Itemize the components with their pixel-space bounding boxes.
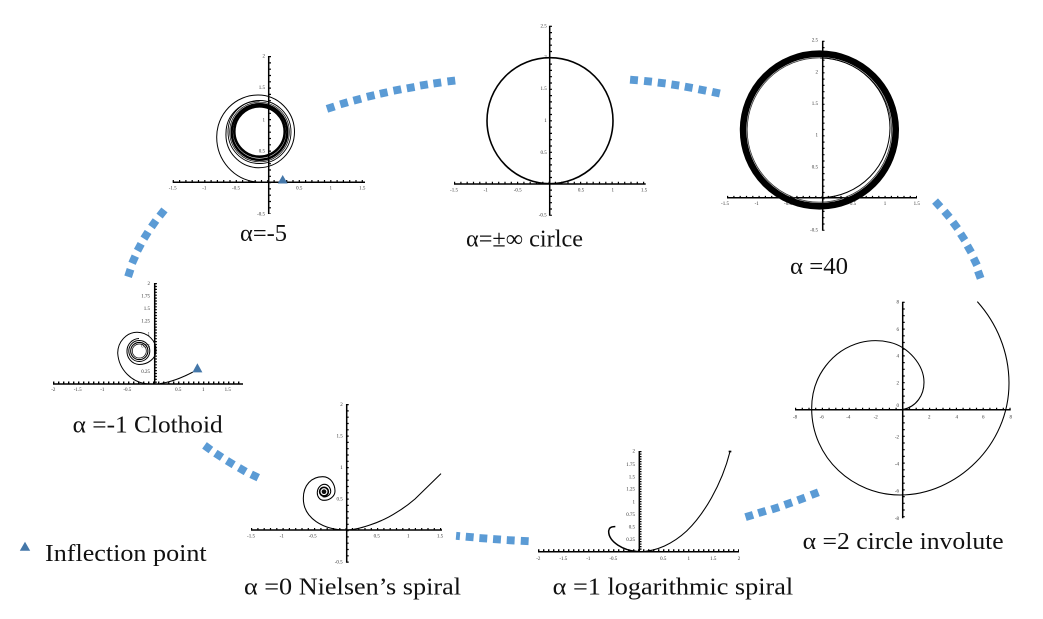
plot: alpha = 2 circle involute: -8: [793, 415, 798, 420]
plot: alpha = -1 clothoid: 2: [148, 282, 150, 287]
plot: alpha = -1 clothoid: -0.5: [123, 388, 132, 393]
plot: alpha = 2 circle involute: 8: [896, 300, 900, 305]
arrow: dashed link from logarithmic spiral to Nielsen's spiral: [456, 532, 528, 545]
plot: alpha = 0 Nielsen's spiral: 0.5: [336, 497, 343, 502]
plot: alpha = -5 spiral: 0.5: [259, 150, 266, 155]
plot: alpha = -1 clothoid: [51, 282, 243, 393]
plot: alpha = 2 circle involute: 2: [928, 415, 931, 420]
plot: alpha = 1 logarithmic spiral: 0.5: [629, 526, 636, 531]
plot: alpha = infinity circle: 1: [544, 119, 547, 124]
plot: alpha = 1 logarithmic spiral: -1.5: [559, 557, 568, 562]
plot: alpha = 1 logarithmic spiral: 0.5: [660, 557, 667, 562]
plot: alpha = -5 spiral: 1.5: [259, 86, 266, 91]
plot: alpha = infinity circle: -1.5: [450, 188, 458, 193]
plot: alpha = 40: -0.5: [784, 202, 792, 207]
arrow: dashed link from circle to alpha 40: [630, 76, 720, 97]
plot: alpha = 2 circle involute: -6: [820, 415, 824, 420]
plot: alpha = infinity circle: 2: [544, 55, 547, 60]
plot: alpha = 1 logarithmic spiral: 1.75: [626, 463, 636, 468]
plot: alpha = -1 clothoid: 1.5: [225, 388, 231, 393]
plot: alpha = -5 spiral: 1.5: [359, 186, 366, 192]
plot: alpha = infinity circle: 0.5: [540, 151, 547, 156]
plot: alpha = 2 circle involute: -2: [874, 415, 878, 420]
plot: alpha = infinity circle: [450, 24, 648, 219]
plot: alpha = 0 Nielsen's spiral: -1: [280, 534, 284, 539]
plot: alpha = 2 circle involute: 0: [896, 404, 900, 409]
label: alpha -1 clothoid: α =-1 Clothoid: [73, 413, 223, 439]
plot: alpha = infinity circle: 1: [611, 188, 614, 193]
plot: alpha = -5 spiral: -0.5: [232, 186, 240, 192]
icon: inflection point marker on alpha = -5: [278, 175, 288, 184]
arrow: dashed link from clothoid to alpha -5: [125, 208, 167, 277]
plot: alpha = 2 circle involute: -2: [895, 436, 899, 441]
plot: alpha = 40: 2: [816, 70, 818, 75]
plot: alpha = 2 circle involute: 8: [1009, 415, 1012, 420]
plot: alpha = -5 spiral: [169, 54, 366, 217]
icon: legend triangle: [20, 542, 30, 551]
plot: alpha = -5 spiral: 0.5: [296, 186, 303, 192]
plot: alpha = 0 Nielsen's spiral: -0.5: [335, 560, 343, 565]
plot: alpha = 40: 1: [816, 134, 818, 139]
plot: alpha = -1 clothoid: -1.5: [74, 388, 82, 393]
plot: alpha = -1 clothoid: 1: [202, 388, 205, 393]
icon: inflection point marker on clothoid: [192, 363, 202, 372]
plot: alpha = 2 circle involute: -8: [895, 517, 899, 522]
plot: alpha = 2 circle involute: 2: [896, 381, 900, 386]
plot: alpha = 40: -0.5: [810, 229, 818, 234]
plot: alpha = -1 clothoid: 0.5: [175, 388, 182, 393]
arrow: dashed link from involute to logarithmic spiral: [745, 489, 819, 520]
plot: alpha = -1 clothoid: 1.5: [144, 307, 150, 312]
plot: alpha = 2 circle involute: -4: [895, 463, 899, 468]
plot: alpha = 2 circle involute: 4: [955, 415, 958, 420]
plot: alpha = -5 spiral: -1: [202, 186, 207, 192]
plot: alpha = 1 logarithmic spiral: 1.5: [710, 557, 717, 562]
plot: alpha = infinity circle: 2.5: [540, 24, 547, 29]
plot: alpha = infinity circle: 1.5: [540, 87, 547, 92]
plot: alpha = -5 spiral: 1: [329, 186, 332, 192]
plot: alpha = 2 circle involute: [793, 300, 1012, 522]
plot: alpha = -1 clothoid: -2: [51, 388, 56, 393]
plot: alpha = 2 circle involute: 6: [982, 415, 985, 420]
plot: alpha = -1 clothoid: 1.75: [141, 295, 150, 300]
arrow: dashed link from alpha -5 to circle: [326, 77, 455, 112]
plot: alpha = -1 clothoid: 0.75: [141, 345, 150, 350]
plot: alpha = 1 logarithmic spiral: 1: [687, 557, 690, 562]
plot: alpha = -1 clothoid: 0.25: [141, 370, 150, 375]
plot: alpha = infinity circle: -0.5: [539, 214, 547, 219]
plot: alpha = 0 Nielsen's spiral: [247, 403, 444, 565]
plot: alpha = 2 circle involute: -6: [895, 489, 899, 494]
legend: inflection point: [20, 541, 207, 567]
plot: alpha = infinity circle: 0.5: [578, 188, 585, 193]
plot: alpha = 1 logarithmic spiral: [536, 450, 741, 562]
plot: alpha = 1 logarithmic spiral: -2: [536, 557, 541, 562]
label: alpha 40: α =40: [790, 254, 848, 280]
plot: alpha = 40: [721, 39, 920, 234]
arrow: dashed link from Nielsen's spiral to clothoid: [203, 443, 259, 481]
plot: alpha = -1 clothoid: -1: [100, 388, 105, 393]
plot: alpha = 1 logarithmic spiral: 2: [632, 450, 636, 455]
plot: alpha = -5 spiral: -1.5: [169, 186, 177, 192]
plot: alpha = 0 Nielsen's spiral: 1: [340, 466, 343, 471]
legend text: Inflection point: [45, 541, 207, 567]
plot: alpha = 2 circle involute: 4: [896, 355, 900, 360]
plot: alpha = 1 logarithmic spiral: 1: [632, 500, 636, 505]
plot: alpha = -1 clothoid: 1: [148, 332, 150, 337]
plot: alpha = 1 logarithmic spiral: 0.25: [626, 538, 636, 543]
plot: alpha = 1 logarithmic spiral: 1.5: [629, 475, 636, 480]
label: alpha 0 Nielsen's spiral: α =0 Nielsen’s spiral: [244, 574, 461, 600]
plot: alpha = 0 Nielsen's spiral: 1.5: [437, 534, 444, 539]
plot: alpha = -5 spiral: -0.5: [257, 212, 265, 217]
plot: alpha = infinity circle: 1.5: [641, 188, 648, 193]
plot: alpha = 2 circle involute: 6: [896, 328, 900, 333]
plot: alpha = 0 Nielsen's spiral: 1.5: [336, 434, 343, 439]
plot: alpha = 40: 0.5: [812, 165, 818, 170]
plot: alpha = -5 spiral: 2: [262, 54, 266, 60]
plot: alpha = 40: 0.5: [850, 202, 857, 207]
plot: alpha = 1 logarithmic spiral: 0.75: [626, 513, 636, 518]
plot: alpha = 0 Nielsen's spiral: 1: [407, 534, 410, 539]
plot: alpha = infinity circle: -0.5: [514, 188, 522, 193]
plot: alpha = infinity circle: -1: [484, 188, 488, 193]
plot: alpha = 0 Nielsen's spiral: 2: [340, 403, 343, 408]
plot: alpha = 1 logarithmic spiral: 2: [738, 557, 741, 562]
plot: alpha = 40: -1: [755, 202, 759, 207]
label: alpha 1 logarithmic spiral: α =1 logarithmic spiral: [553, 574, 794, 600]
plot: alpha = 40: 1.5: [812, 102, 818, 107]
label: alpha -5: α=-5: [240, 221, 287, 247]
plot: alpha = 1 logarithmic spiral: 1.25: [626, 488, 636, 493]
plot: alpha = 40: 2.5: [812, 39, 818, 44]
plot: alpha = 0 Nielsen's spiral: -0.5: [309, 534, 317, 539]
plot: alpha = 0 Nielsen's spiral: 0.5: [374, 534, 380, 539]
label: alpha infinity circle: α=±∞ cirlce: [466, 227, 583, 253]
plot: alpha = 1 logarithmic spiral: -0.5: [609, 557, 618, 562]
plot: alpha = 2 circle involute: -4: [846, 415, 851, 420]
plot: alpha = 40: 1: [884, 202, 887, 207]
plot: alpha = 0 Nielsen's spiral: -1.5: [247, 534, 255, 539]
plot: alpha = -1 clothoid: 1.25: [141, 320, 150, 325]
plot: alpha = 40: -1.5: [721, 202, 729, 207]
plot: alpha = 40: 1.5: [914, 202, 920, 207]
plot: alpha = 1 logarithmic spiral: -1: [586, 557, 591, 562]
label: alpha 2 circle involute: α =2 circle involute: [803, 529, 1004, 555]
arrow: dashed link from alpha 40 to involute: [933, 199, 984, 279]
plot: alpha = -5 spiral: 1: [262, 118, 266, 123]
